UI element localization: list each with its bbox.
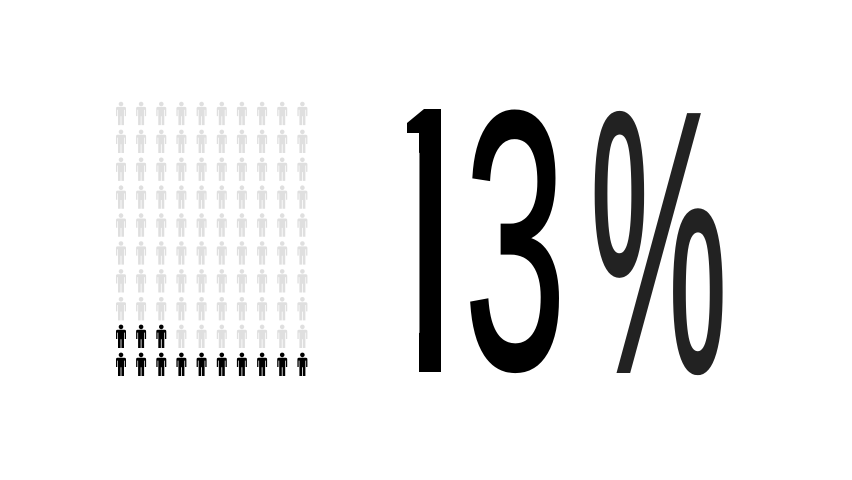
- unfilled people (87): [116, 102, 307, 348]
- digit 1: 1: [363, 25, 498, 455]
- filled people (13): [116, 325, 307, 376]
- infographic canvas: [116, 102, 723, 376]
- pictogram grid: 100 people: [116, 102, 307, 376]
- percentage value: [407, 109, 723, 376]
- percent sign: %: [590, 35, 727, 451]
- digit 3: 3: [464, 35, 566, 446]
